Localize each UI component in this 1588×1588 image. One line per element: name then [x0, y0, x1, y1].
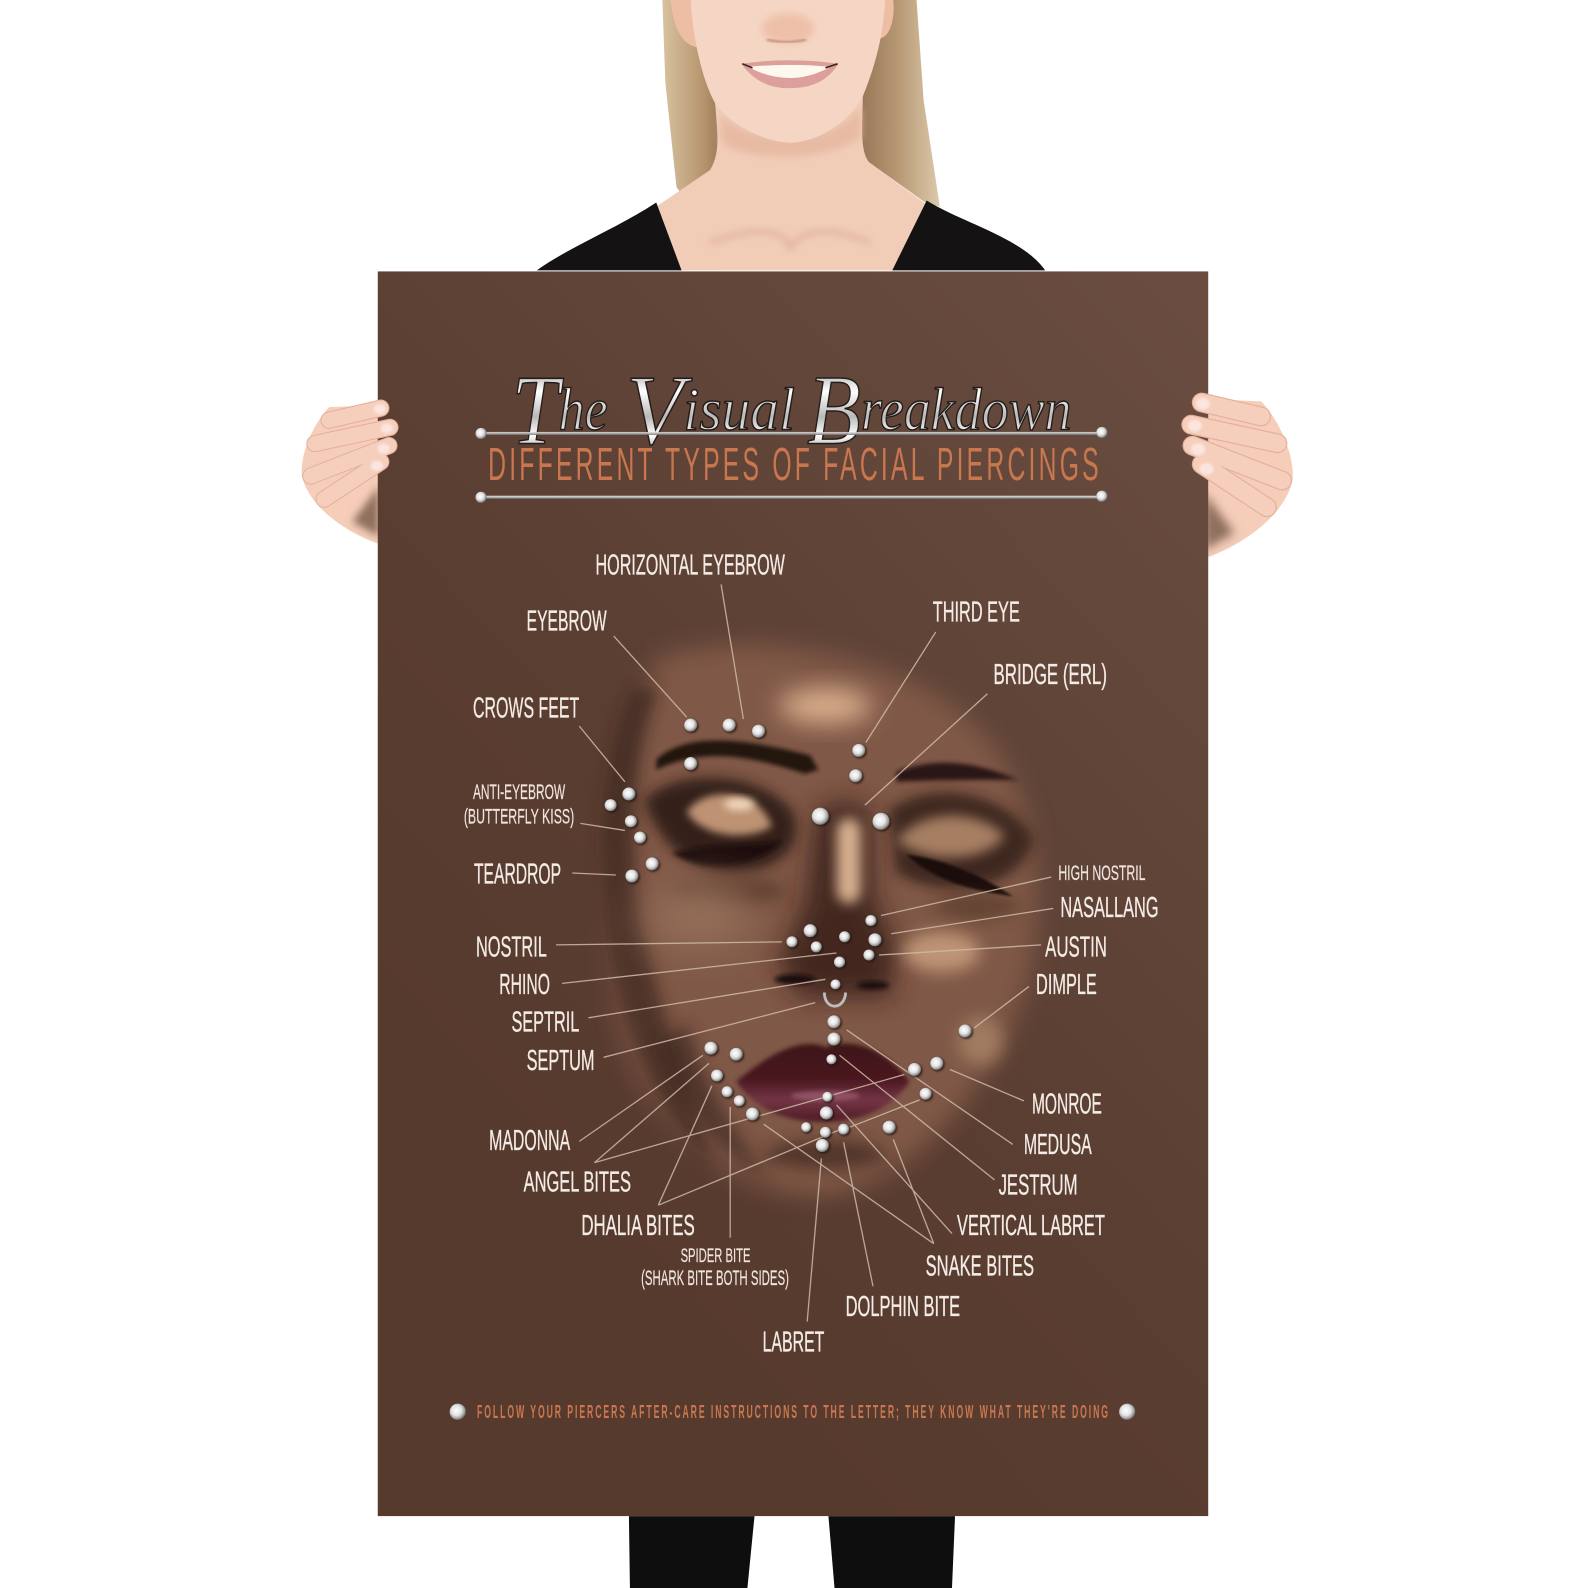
label: madonna: MADONNA — [489, 1125, 570, 1157]
leader lines — [556, 584, 1053, 1322]
label: horizontal eyebrow: HORIZONTAL EYEBROW — [596, 550, 785, 582]
left eye socket — [644, 778, 796, 873]
label: jestrum: JESTRUM — [999, 1170, 1078, 1202]
title: isual — [683, 376, 795, 443]
label: crows feet: CROWS FEET — [473, 693, 579, 725]
right eye socket — [889, 793, 1033, 888]
hair left — [662, 0, 729, 192]
label: medusa: MEDUSA — [1024, 1129, 1092, 1161]
septum ring — [824, 992, 846, 1006]
neck shadow — [721, 106, 861, 156]
left under-eye tone — [673, 877, 785, 905]
collarbone shading — [709, 232, 871, 248]
title: V — [626, 357, 693, 466]
title rod bottom — [475, 491, 1107, 503]
label: rhino: RHINO — [499, 969, 550, 1001]
label: dolphin bite: DOLPHIN BITE — [846, 1291, 960, 1323]
footer note — [450, 1402, 1135, 1422]
label: snake bites: SNAKE BITES — [926, 1251, 1034, 1283]
left eyebrow — [656, 741, 818, 774]
label: spider bite: SPIDER BITE — [681, 1246, 750, 1267]
legs — [629, 1516, 955, 1588]
nose — [762, 13, 814, 44]
face base — [609, 645, 1037, 1195]
label: dhalia bites: DHALIA BITES — [581, 1210, 695, 1242]
left jaw shadow — [658, 1023, 770, 1180]
label: septril: SEPTRIL — [511, 1006, 579, 1038]
left eyelid — [687, 794, 772, 835]
label: austin: AUSTIN — [1045, 932, 1107, 964]
right hand fingers — [1188, 398, 1282, 507]
lips — [736, 1044, 909, 1122]
neck and chest — [656, 91, 927, 270]
label: monroe: MONROE — [1032, 1089, 1102, 1121]
right palm — [1204, 399, 1293, 559]
label: labret: LABRET — [763, 1327, 824, 1359]
nostrils — [775, 974, 889, 989]
lower right cheek highlight — [958, 1017, 1003, 1065]
left hair shadow — [603, 689, 714, 1165]
ears — [670, 0, 894, 48]
label: butterfly kiss: (BUTTERFLY KISS) — [464, 804, 574, 828]
right eyelid — [896, 816, 1005, 858]
label: eyebrow: EYEBROW — [527, 605, 607, 637]
right lashes — [906, 855, 1013, 896]
right eyebrow — [896, 763, 1018, 782]
black shirt — [537, 201, 1045, 270]
label: third eye: THIRD EYE — [933, 596, 1020, 628]
left palm — [302, 405, 379, 544]
label: shark bite: (SHARK BITE BOTH SIDES) — [641, 1266, 789, 1290]
label: angel bites: ANGEL BITES — [524, 1167, 631, 1199]
label: nostril: NOSTRIL — [476, 932, 547, 964]
left eyelid highlight — [724, 798, 755, 810]
label: vertical labret: VERTICAL LABRET — [957, 1210, 1105, 1242]
left under-eye lashes — [672, 841, 782, 865]
label: high nostril: HIGH NOSTRIL — [1058, 861, 1146, 885]
title — [511, 357, 1071, 466]
left hand fingers — [311, 404, 393, 499]
forehead highlight — [779, 688, 872, 724]
title rod top — [475, 427, 1107, 439]
person holding the poster — [302, 0, 1293, 1588]
title: he — [559, 376, 608, 443]
piercing studs — [605, 719, 972, 1152]
right cheek highlight — [903, 932, 980, 972]
nose highlight — [837, 818, 861, 903]
label: bridge: BRIDGE (ERL) — [994, 659, 1107, 691]
lip shine — [791, 1091, 860, 1101]
title: T — [511, 357, 564, 466]
label: nasallang: NASALLANG — [1060, 892, 1159, 924]
right under-eye tone — [935, 894, 1020, 919]
smile — [741, 60, 839, 88]
nose shadows — [778, 800, 896, 998]
hair right — [851, 0, 940, 207]
chin shadow — [765, 1140, 886, 1169]
title: B — [807, 357, 861, 466]
face illustration — [603, 645, 1037, 1195]
label: anti-eyebrow: ANTI-EYEBROW — [473, 780, 565, 804]
label: teardrop: TEARDROP — [474, 859, 561, 891]
left cheek tone — [643, 882, 755, 951]
label: septum: SEPTUM — [527, 1045, 594, 1077]
panel: poster — [378, 271, 1208, 1516]
title: reakdown — [861, 376, 1071, 443]
label: dimple: DIMPLE — [1036, 969, 1097, 1001]
lower face — [691, 0, 885, 143]
